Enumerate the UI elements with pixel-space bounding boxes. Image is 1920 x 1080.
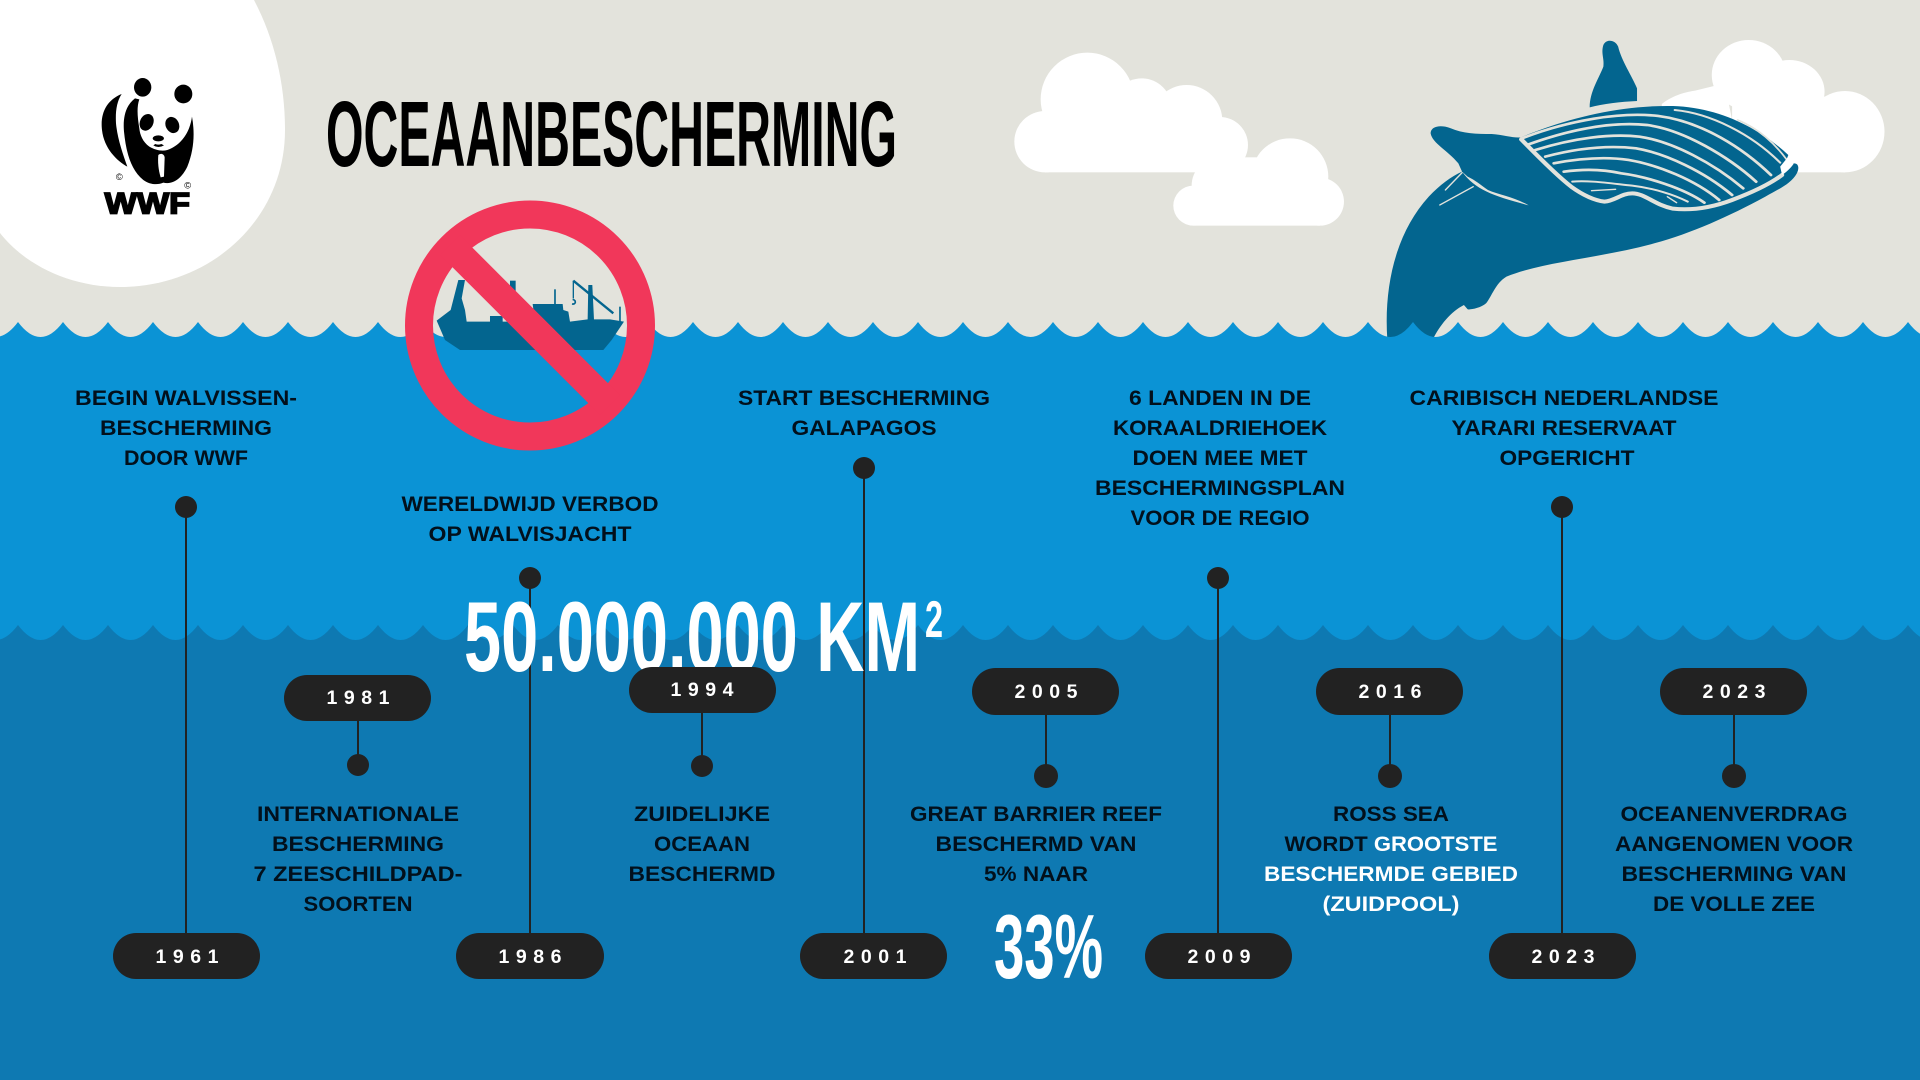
timeline 2023 lower bbox=[1489, 496, 1636, 979]
lower water layer bbox=[0, 625, 1920, 1080]
timeline 1994 bbox=[629, 667, 776, 777]
timeline 2016 bbox=[1316, 668, 1463, 788]
text: oceanenverdrag: BESCHERMING VAN bbox=[1622, 862, 1846, 886]
text: oceanenverdrag bbox=[1615, 802, 1853, 916]
whale with cloud bbox=[1387, 40, 1884, 340]
text: zeeschildpadsoorten bbox=[254, 802, 462, 916]
text: wereldwijd verbod bbox=[402, 492, 658, 546]
text: zuidelijke oceaan: ZUIDELIJKE bbox=[634, 802, 770, 826]
WWF panda logo: © bbox=[116, 172, 123, 182]
text: zeeschildpadsoorten: SOORTEN bbox=[304, 892, 412, 916]
text: koraaldriehoek: VOOR DE REGIO bbox=[1130, 506, 1310, 530]
timeline 2023 upper: 2023 bbox=[1702, 681, 1766, 703]
text: ross sea: WORDT GROOTSTE bbox=[1284, 832, 1498, 856]
text: galapagos bbox=[738, 386, 990, 440]
text: oceanenverdrag: AANGENOMEN VOOR bbox=[1615, 832, 1853, 856]
timeline 2001: 2001 bbox=[844, 946, 907, 968]
text: koraaldriehoek: KORAALDRIEHOEK bbox=[1113, 416, 1327, 440]
timeline 2005 bbox=[972, 668, 1119, 788]
text: yarari reservaat: YARARI RESERVAAT bbox=[1452, 416, 1676, 440]
text: wereldwijd verbod: OP WALVISJACHT bbox=[428, 522, 632, 546]
timeline 2005: 2005 bbox=[1014, 681, 1078, 703]
text: zeeschildpadsoorten: 7 ZEESCHILDPAD- bbox=[254, 862, 462, 886]
timeline 2001 bbox=[800, 457, 947, 979]
prohibition sign bbox=[419, 214, 641, 436]
timeline 1981: 1981 bbox=[326, 687, 390, 709]
text: zeeschildpadsoorten: BESCHERMING bbox=[272, 832, 444, 856]
text: koraaldriehoek: DOEN MEE MET bbox=[1132, 446, 1308, 470]
big number: 50.000.000 km2: 50.000.000 KM bbox=[464, 581, 920, 692]
text: great barrier reef bbox=[910, 802, 1162, 886]
text: ross sea: BESCHERMDE GEBIED bbox=[1264, 862, 1518, 886]
cloud behind whale bbox=[1662, 40, 1884, 172]
icon: banned whaling ship bbox=[419, 214, 641, 436]
text: koraaldriehoek bbox=[1095, 386, 1345, 530]
white logo blob bbox=[0, 0, 285, 287]
timeline 1961: 1961 bbox=[156, 946, 219, 968]
timeline 2009 bbox=[1145, 567, 1292, 979]
text: koraaldriehoek: 6 LANDEN IN DE bbox=[1129, 386, 1311, 410]
text: zuidelijke oceaan: OCEAAN bbox=[654, 832, 750, 856]
timeline 2023 lower: 2023 bbox=[1532, 946, 1595, 968]
text: begin walvissenbescherming bbox=[75, 386, 297, 470]
text: begin walvissenbescherming: BESCHERMING bbox=[100, 416, 272, 440]
text: great barrier reef: 5% NAAR bbox=[984, 862, 1088, 886]
text: ross sea bbox=[1264, 802, 1518, 916]
text: great barrier reef: GREAT BARRIER REEF bbox=[910, 802, 1162, 826]
text: oceanenverdrag: OCEANENVERDRAG bbox=[1620, 802, 1848, 826]
WWF panda logo: © bbox=[184, 181, 191, 191]
text: begin walvissenbescherming: DOOR WWF bbox=[124, 446, 248, 470]
text: zeeschildpadsoorten: INTERNATIONALE bbox=[257, 802, 459, 826]
text: zuidelijke oceaan bbox=[628, 802, 776, 886]
text: begin walvissenbescherming: BEGIN WALVISSEN- bbox=[75, 386, 297, 410]
WWF panda logo: WWF bbox=[105, 188, 190, 221]
title: OCEAANBESCHERMING bbox=[326, 82, 897, 186]
upper water layer bbox=[0, 322, 1920, 1080]
whale silhouette bbox=[1387, 41, 1798, 340]
text: yarari reservaat: OPGERICHT bbox=[1500, 446, 1634, 470]
text: oceanenverdrag: DE VOLLE ZEE bbox=[1653, 892, 1815, 916]
WWF panda logo bbox=[102, 78, 194, 221]
timeline 1986: 1986 bbox=[498, 946, 562, 968]
text: yarari reservaat: CARIBISCH NEDERLANDSE bbox=[1410, 386, 1718, 410]
text: ross sea: ROSS SEA bbox=[1333, 802, 1449, 826]
text: galapagos: START BESCHERMING bbox=[738, 386, 990, 410]
text: wereldwijd verbod: WERELDWIJD VERBOD bbox=[402, 492, 658, 516]
text: koraaldriehoek: BESCHERMINGSPLAN bbox=[1095, 476, 1345, 500]
timeline 1981 bbox=[284, 675, 431, 776]
timeline 1986 bbox=[456, 567, 604, 979]
text: galapagos: GALAPAGOS bbox=[792, 416, 936, 440]
ship bbox=[437, 280, 624, 350]
timeline 1994: 1994 bbox=[670, 679, 734, 701]
timeline 1961 bbox=[113, 496, 260, 979]
timeline 2023 upper bbox=[1660, 668, 1807, 788]
text: zuidelijke oceaan: BESCHERMD bbox=[628, 862, 776, 886]
timeline 2009: 2009 bbox=[1188, 946, 1251, 968]
text: yarari reservaat bbox=[1410, 386, 1718, 470]
big number: 33%: 33% bbox=[994, 897, 1103, 998]
big number: 50.000.000 km2: 2 bbox=[925, 591, 943, 649]
text: ross sea: (ZUIDPOOL) bbox=[1322, 892, 1460, 916]
text: great barrier reef: BESCHERMD VAN bbox=[936, 832, 1136, 856]
timeline 2016: 2016 bbox=[1358, 681, 1422, 703]
clouds left bbox=[1014, 53, 1344, 226]
